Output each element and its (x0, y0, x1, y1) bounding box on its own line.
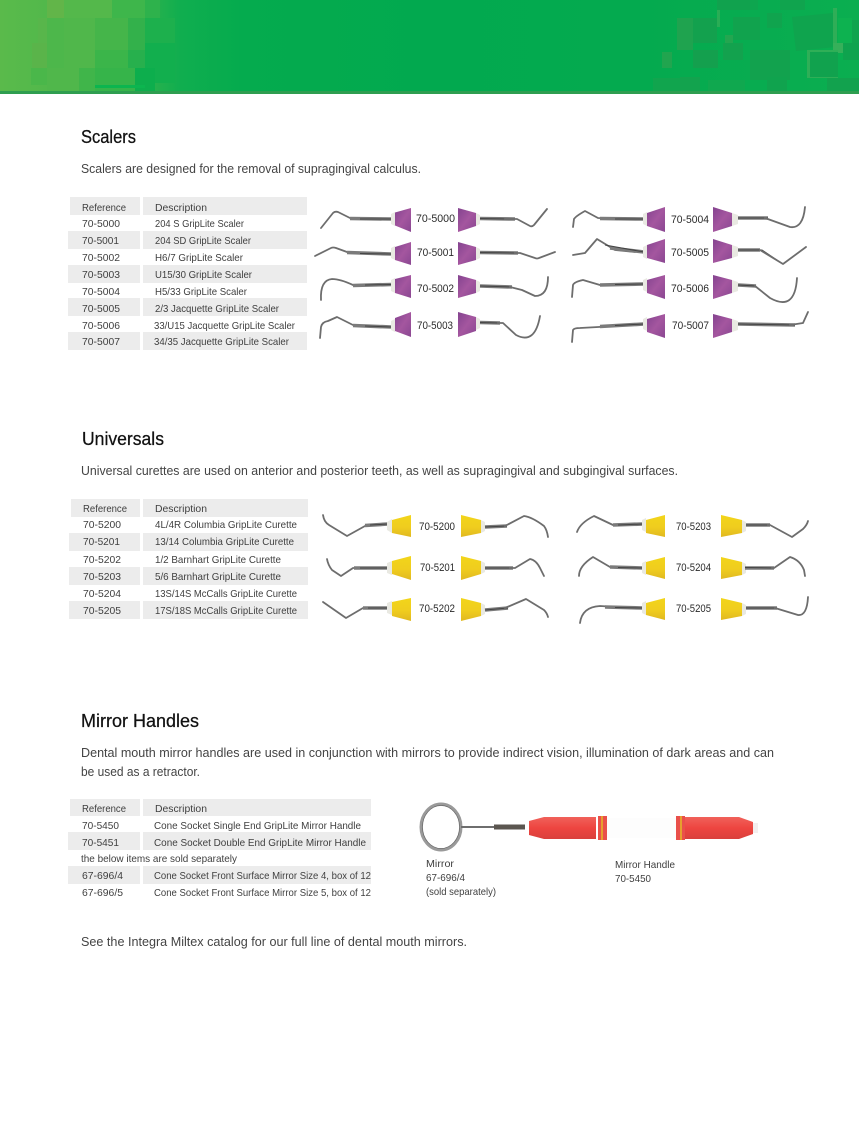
instrument: 70-5006 (572, 275, 797, 302)
table: mirror handles: Cone Socket Front Surface Mirror Size 5, box of 12 (154, 887, 371, 899)
section heading: Scalers: Scalers (81, 127, 136, 147)
instrument: 70-5205 (580, 597, 808, 623)
instrument: 70-5000: 70-5000 (416, 213, 455, 225)
table: scalers: 70-5003 (82, 269, 120, 281)
table: scalers: 70-5002 (82, 252, 120, 264)
table: universals: 70-5205 (83, 605, 121, 617)
mirror and handle illustration (421, 804, 758, 850)
table: mirror handles: the below items are sold separately (81, 853, 238, 865)
label: mirror (426, 858, 496, 898)
scalers intro text: Scalers are designed for the removal of supragingival calculus. (81, 162, 421, 176)
table: scalers: 70-5007 (82, 336, 120, 348)
instrument: 70-5002 (321, 275, 548, 300)
table: scalers: 70-5005 (82, 303, 120, 315)
table: universals: 13/14 Columbia GripLite Curette (155, 536, 294, 548)
table: scalers: 70-5001 (82, 235, 119, 247)
table: scalers: 70-5004 (82, 286, 120, 298)
label: mirror handle (615, 859, 675, 885)
table: universals: Reference (83, 503, 127, 515)
instrument: 70-5204: 70-5204 (676, 562, 711, 574)
instrument: 70-5006: 70-5006 (671, 283, 709, 295)
table: universals: 13S/14S McCalls GripLite Curette (155, 588, 297, 600)
instrument: 70-5001 (315, 242, 555, 265)
table: scalers: 204 S GripLite Scaler (155, 218, 244, 230)
table: universals: 70-5204 (83, 588, 121, 600)
table: universals: Description (155, 503, 207, 515)
mirror handles intro text: Dental mouth mirror handles are used in conjunction with mirrors to provide indirect vision, illumination of dark areas and can (81, 746, 774, 760)
instrument: 70-5003: 70-5003 (417, 320, 453, 332)
instrument: 70-5007: 70-5007 (672, 320, 709, 332)
table: scalers: 33/U15 Jacquette GripLite Scaler (154, 320, 295, 332)
table: scalers: H5/33 GripLite Scaler (155, 286, 247, 298)
instrument: 70-5202 (323, 598, 548, 621)
table: scalers: 204 SD GripLite Scaler (155, 235, 251, 247)
table: mirror handles: Description (155, 803, 207, 815)
table: universals: 70-5202 (83, 554, 121, 566)
label: mirror: (sold separately) (426, 886, 496, 898)
table: mirror handles: 70-5450 (82, 820, 119, 832)
instrument: 70-5001: 70-5001 (417, 247, 454, 259)
table: mirror handles: Cone Socket Single End GripLite Mirror Handle (154, 820, 361, 832)
table: scalers: 2/3 Jacquette GripLite Scaler (155, 303, 279, 315)
universals intro text: Universal curettes are used on anterior and posterior teeth, as well as supragingival and subgingival surfaces. (81, 464, 678, 478)
table: universals: 5/6 Barnhart GripLite Curette (155, 571, 281, 583)
header banner (0, 0, 859, 94)
table: universals: 70-5203 (83, 571, 121, 583)
table: mirror handles: Cone Socket Front Surface Mirror Size 4, box of 12 (154, 870, 371, 882)
label: mirror handle: Mirror Handle (615, 859, 675, 871)
label: mirror: Mirror (426, 858, 455, 870)
instrument: 70-5200 (323, 515, 548, 537)
instrument: 70-5005 (573, 239, 806, 264)
instrument: 70-5007 (572, 312, 808, 342)
table: scalers: 34/35 Jacquette GripLite Scaler (154, 336, 289, 348)
instrument: 70-5004: 70-5004 (671, 214, 709, 226)
instrument: 70-5002: 70-5002 (417, 283, 454, 295)
instrument: 70-5200: 70-5200 (419, 521, 455, 533)
table: universals: 1/2 Barnhart GripLite Curette (155, 554, 281, 566)
section heading: Universals: Universals (82, 429, 164, 449)
table: universals: 70-5200 (83, 519, 121, 531)
instrument: 70-5005: 70-5005 (671, 247, 709, 259)
instrument: 70-5201 (327, 556, 544, 580)
table: scalers: Reference (82, 202, 126, 214)
table: mirror handles: Reference (82, 803, 126, 815)
table: universals: 70-5201 (83, 536, 120, 548)
table: mirror handles (68, 799, 371, 899)
table: scalers: 70-5000 (82, 218, 120, 230)
table: universals: 17S/18S McCalls GripLite Curette (155, 605, 297, 617)
instrument: 70-5204 (579, 557, 805, 579)
table: universals (69, 499, 308, 619)
table: mirror handles: Cone Socket Double End GripLite Mirror Handle (154, 837, 366, 849)
table: scalers: 70-5006 (82, 320, 120, 332)
label: mirror handle: 70-5450 (615, 873, 651, 885)
table: mirror handles: 67-696/4 (82, 870, 123, 882)
table: scalers: H6/7 GripLite Scaler (155, 252, 243, 264)
table: scalers: Description (155, 202, 207, 214)
section heading: Mirror Handles: Mirror Handles (81, 711, 199, 731)
table: scalers: U15/30 GripLite Scaler (155, 269, 252, 281)
table: mirror handles: 70-5451 (82, 837, 119, 849)
instrument: 70-5000 (321, 208, 547, 232)
label: mirror: 67-696/4 (426, 872, 465, 884)
table: scalers (68, 197, 307, 350)
mirror handles intro text: be used as a retractor. (81, 765, 200, 779)
instrument: 70-5203 (577, 515, 808, 537)
instrument: 70-5003 (320, 312, 540, 338)
table: universals: 4L/4R Columbia GripLite Curette (155, 519, 297, 531)
table: mirror handles: 67-696/5 (82, 887, 123, 899)
instrument: 70-5202: 70-5202 (419, 603, 455, 615)
instrument: 70-5201: 70-5201 (420, 562, 455, 574)
instrument: 70-5203: 70-5203 (676, 521, 711, 533)
catalog note: See the Integra Miltex catalog for our full line of dental mouth mirrors. (81, 935, 467, 949)
instrument: 70-5004 (573, 207, 805, 232)
mirror handles intro text (81, 746, 774, 779)
instrument: 70-5205: 70-5205 (676, 603, 711, 615)
